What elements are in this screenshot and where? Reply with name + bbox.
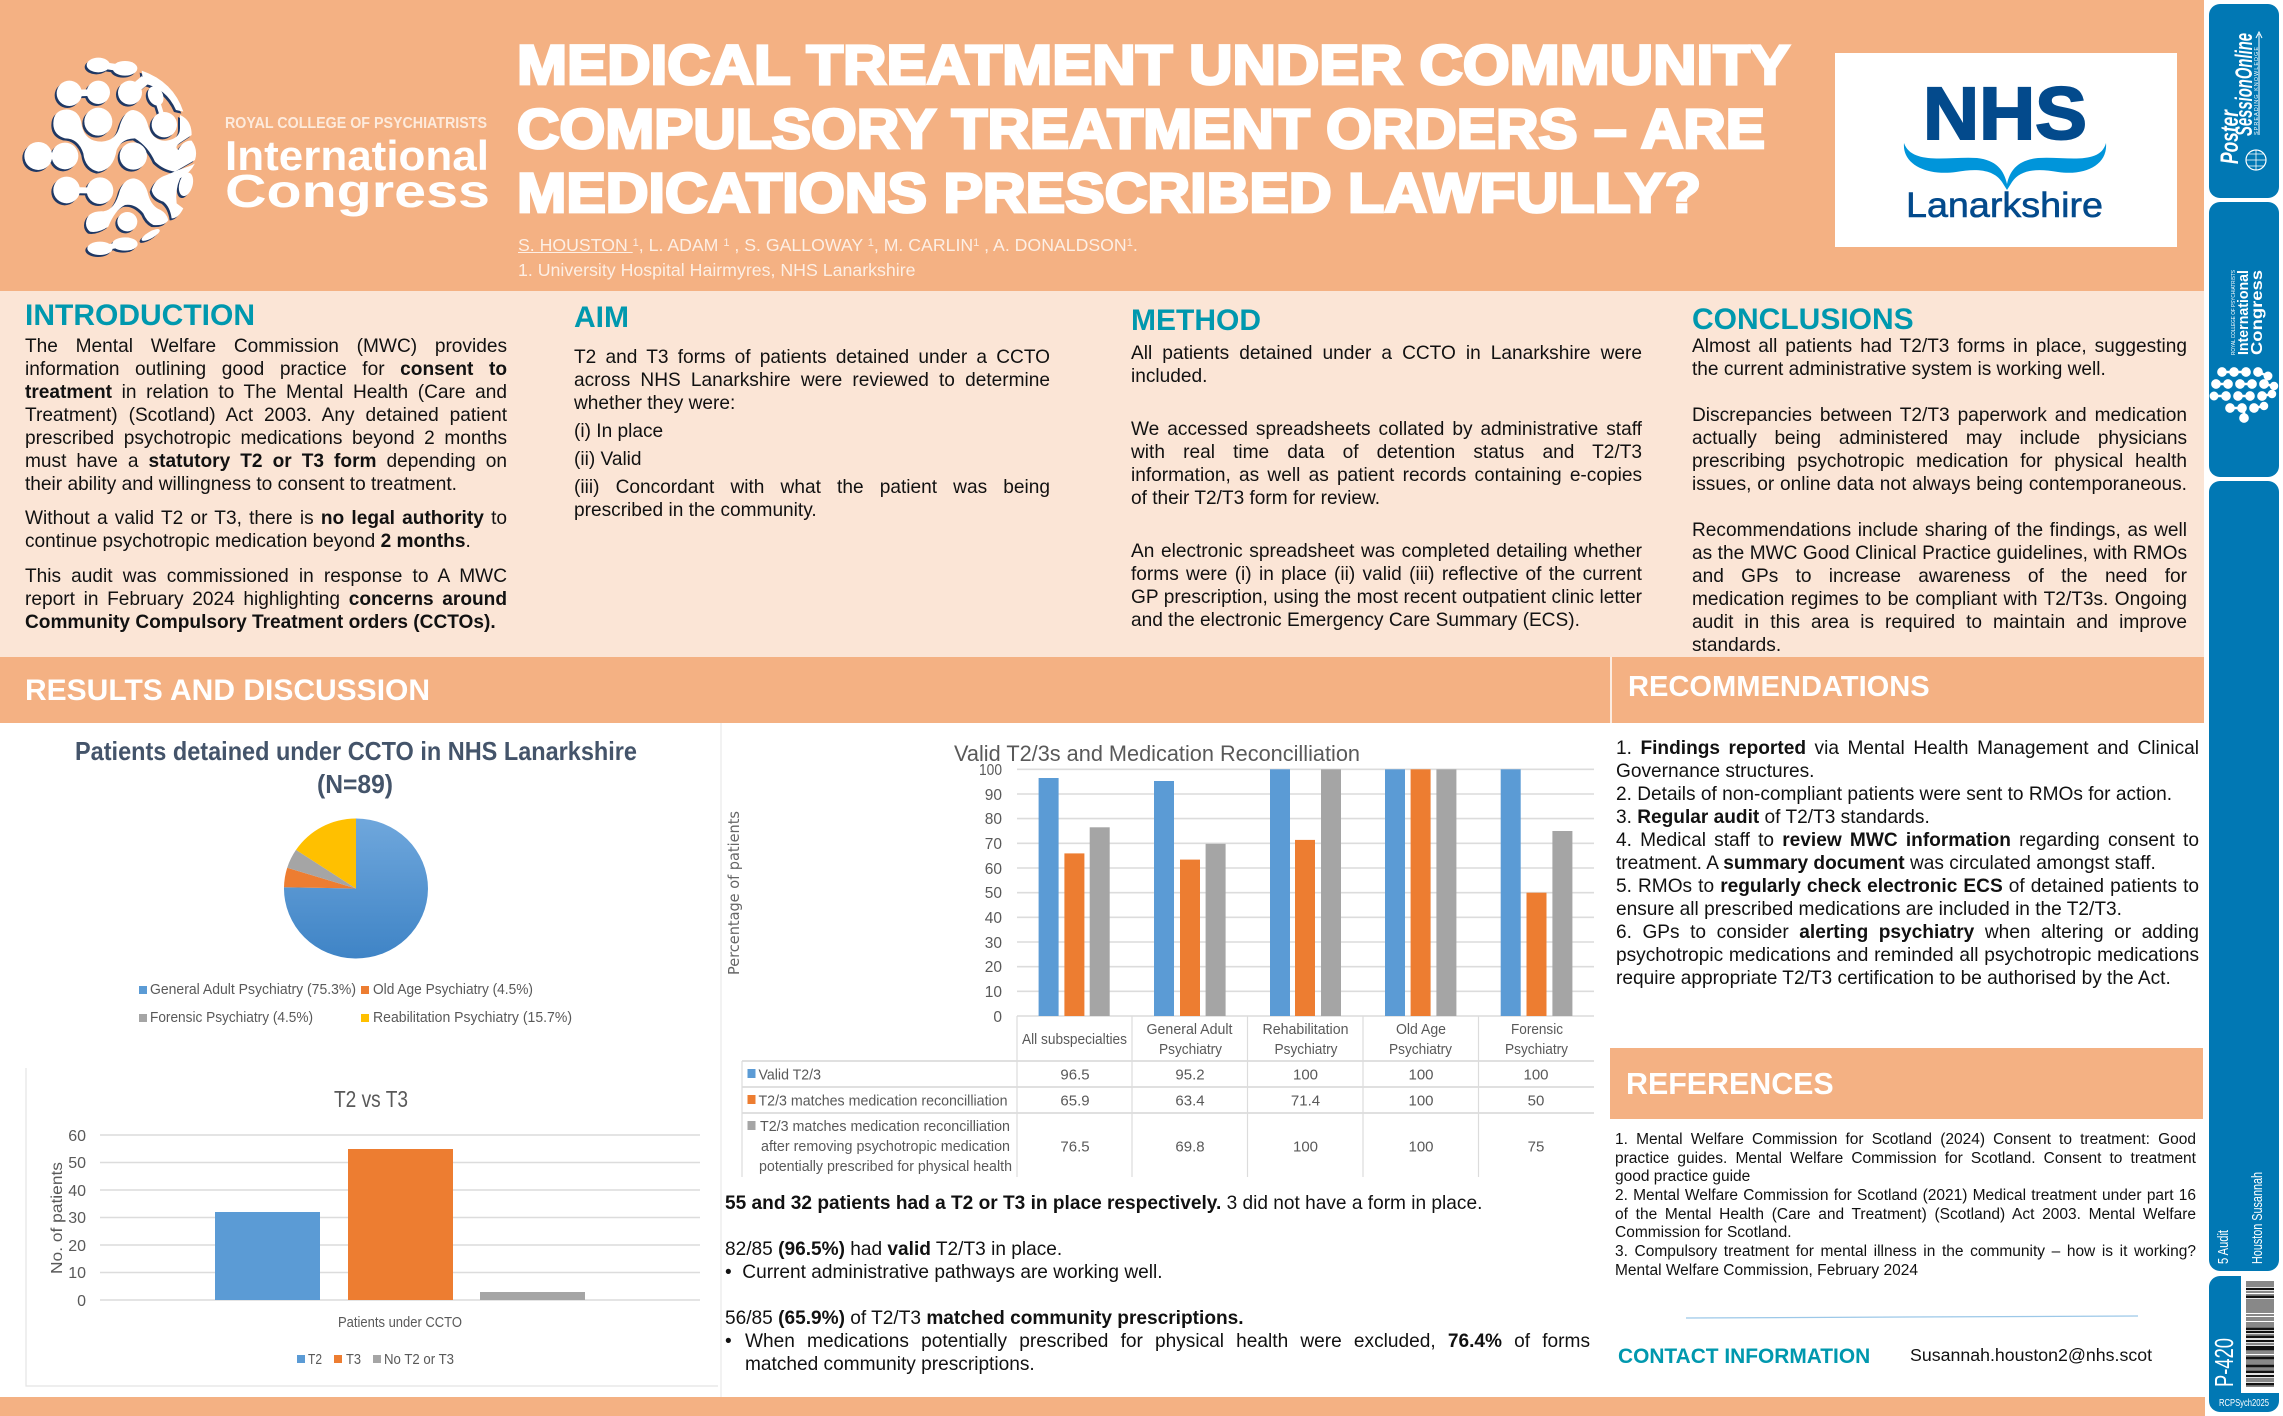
text: method: GP prescription, using the most recent outpatient clinic letter [1131, 587, 1642, 608]
data table: 100 [1293, 1138, 1318, 1156]
pie legend [139, 982, 572, 1026]
data table: 100 [1408, 1092, 1434, 1110]
text: conclusions: and GPs to increase awareness of the need for [1692, 566, 2187, 587]
bar legend [297, 1352, 454, 1368]
data table: Psychiatry [1274, 1041, 1338, 1058]
data table: 76.5 [1060, 1138, 1090, 1156]
data table: Old Age [1396, 1021, 1446, 1038]
heading: conclusions: CONCLUSIONS [1692, 303, 1914, 336]
panel divider [720, 723, 722, 1397]
bar chart with data table: valid T2/3s and medication reconciliation: 70 [985, 836, 1002, 853]
data table: 75 [1528, 1138, 1544, 1156]
logo: NHS Lanarkshire: NHS [1923, 72, 2087, 155]
text: method: with real time data of detention status and T2/T3 [1131, 442, 1642, 463]
text: introduction: must have a statutory T2 or T3 form depending on [25, 451, 507, 472]
text: conclusions: standards. [1692, 635, 1781, 656]
data table: 100 [1408, 1066, 1434, 1084]
bar chart with data table: valid T2/3s and medication reconciliation: 10 [985, 984, 1002, 1001]
bar chart with data table: valid T2/3s and medication reconciliation: 40 [985, 910, 1002, 927]
logo: NHS Lanarkshire: Lanarkshire [1906, 186, 2103, 225]
bar legend: No T2 or T3 [384, 1352, 454, 1368]
text: method: included. [1131, 366, 1207, 387]
text: introduction: prescribed psychotropic medications beyond 2 months [25, 428, 507, 449]
heading: aim: AIM [574, 301, 629, 334]
text: results findings: When medications potentially prescribed for physical health were excluded, 76.4% of forms [745, 1331, 1590, 1352]
text: recommendations list: require appropriate T2/T3 certification to be authorised by the Act. [1616, 968, 2171, 989]
bar chart with data table: valid T2/3s and medication reconciliation: 80 [985, 811, 1002, 828]
text: references: good practice guide [1615, 1168, 1750, 1185]
text: aim: T2 and T3 forms of patients detained under a CCTO [574, 347, 1050, 368]
text: conclusions: audit in this area is required to maintain and improve [1692, 612, 2187, 633]
text: conclusions: Almost all patients had T2/T3 forms in place, suggesting [1692, 336, 2187, 357]
text: results findings: matched community prescriptions. [745, 1354, 1035, 1375]
text: recommendations list: Governance structures. [1616, 761, 1814, 782]
bar chart: T2 vs T3: T2 vs T3 [334, 1086, 408, 1112]
text: conclusions: Discrepancies between T2/T3 paperwork and medication [1692, 405, 2187, 426]
text: references: 2. Mental Welfare Commission for Scotland (2021) Medical treatment under part 16 [1615, 1187, 2196, 1204]
text: conclusions: issues, or online data not always being contemporaneous. [1692, 474, 2187, 495]
data table: Rehabilitation [1262, 1021, 1348, 1038]
text: recommendations list: treatment. A summary document was circulated amongst staff. [1616, 853, 2156, 874]
logo text: Royal College of Psychiatrists International Congress: ROYAL COLLEGE OF PSYCHIATRISTS [225, 115, 487, 132]
text: conclusions: Recommendations include sharing of the findings, as well [1692, 520, 2187, 541]
pie legend: Reabilitation Psychiatry (15.7%) [373, 1010, 572, 1026]
bars: T2/3 matches medication reconciliation [1064, 769, 1546, 1016]
sidebar tab: Poster Session Online: SPREADING KNOWLEDGE [2254, 47, 2260, 135]
text: references: of the Mental Health (Care and Treatment) (Scotland) Act 2003. Mental Welfare [1615, 1206, 2196, 1223]
bars: matches after removing physical health medication [1090, 769, 1572, 1016]
sidebar tab: author and category: 5 Audit [2216, 1230, 2232, 1264]
text: aim: prescribed in the community. [574, 500, 817, 521]
text: introduction: treatment in relation to The Mental Health (Care and [25, 382, 507, 403]
text: conclusions: actually being administered may include physicians [1692, 428, 2187, 449]
bar chart: T2 vs T3: 10 [68, 1265, 86, 1282]
affiliation: 1. University Hospital Hairmyres, NHS Lanarkshire [518, 260, 916, 280]
text: conclusions: prescribing psychotropic medication for physical health [1692, 451, 2187, 472]
data table: Psychiatry [1389, 1041, 1452, 1058]
data table [742, 1016, 1594, 1177]
heading: results and discussion: RESULTS AND DISCUSSION [25, 674, 430, 707]
text: introduction: their ability and willingness to consent to treatment. [25, 474, 457, 495]
bar chart with data table: valid T2/3s and medication reconciliation: 30 [985, 935, 1002, 952]
bar chart: T2 vs T3: 40 [68, 1183, 86, 1200]
text: results findings [725, 1193, 1590, 1375]
data table: 50 [1528, 1092, 1544, 1110]
text: results findings: 56/85 (65.9%) of T2/T3 matched community prescriptions. [725, 1308, 1244, 1329]
text: references: Commission for Scotland. [1615, 1224, 1792, 1241]
text: method: information, as well as patient records containing e-copies [1131, 465, 1642, 486]
text: introduction: report in February 2024 highlighting concerns around [25, 589, 507, 610]
text: results findings: • [725, 1331, 732, 1352]
white divider between results and recommendations [1610, 657, 1612, 723]
data table: 100 [1523, 1066, 1549, 1084]
data table: 71.4 [1291, 1092, 1320, 1110]
bar chart with data table: valid T2/3s and medication reconciliation: 20 [985, 959, 1002, 976]
pie legend: Old Age Psychiatry (4.5%) [373, 982, 533, 998]
text: recommendations list: 5. RMOs to regularly check electronic ECS of detained patients to [1616, 876, 2199, 897]
title: MEDICAL TREATMENT UNDER COMMUNITY [517, 33, 1790, 96]
sidebar tab: Poster Session Online [2209, 4, 2279, 198]
text: recommendations list: 4. Medical staff to review MWC information regarding consent to [1616, 830, 2199, 851]
text: method: forms were (i) in place (ii) valid (iii) reflective of the current [1131, 564, 1642, 585]
references header bar [1610, 1048, 2203, 1119]
sidebar tab: poster number and barcode: P-420 [2209, 1338, 2239, 1387]
text: method: An electronic spreadsheet was completed detailing whether [1131, 541, 1642, 562]
text: conclusions: medication regimes to be compliant with T2/T3s. Ongoing [1692, 589, 2187, 610]
barcode [2246, 1282, 2274, 1386]
data table: Valid T2/3 [758, 1066, 821, 1084]
text: contact email: Susannah.houston2@nhs.scot [1910, 1345, 2152, 1365]
authors: S. HOUSTON 1, L. ADAM 1 , S. GALLOWAY 1, M. CARLIN1 , A. DONALDSON1. [518, 235, 1138, 255]
text: introduction: The Mental Welfare Commission (MWC) provides [25, 336, 507, 357]
bar chart with data table: valid T2/3s and medication reconciliation [725, 741, 1594, 1177]
text: references: 3. Compulsory treatment for mental illness in the community – how is it working? [1615, 1243, 2196, 1260]
logo: college brain mark [24, 58, 196, 255]
data table: All subspecialties [1022, 1031, 1127, 1048]
data table: 95.2 [1175, 1066, 1205, 1084]
data table: T2/3 matches medication reconcilliation [760, 1118, 1010, 1135]
data table: T2/3 matches medication reconcilliation [758, 1092, 1008, 1110]
pie legend: Forensic Psychiatry (4.5%) [150, 1010, 313, 1026]
bar chart with data table: valid T2/3s and medication reconciliation: Percentage of patients [725, 811, 743, 975]
data table: 63.4 [1175, 1092, 1205, 1110]
data table: Forensic [1511, 1021, 1563, 1038]
sidebar tab: International Congress: ROYAL COLLEGE OF PSYCHIATRISTS [2231, 270, 2237, 355]
text: aim [574, 347, 1050, 521]
data table: 96.5 [1060, 1066, 1090, 1084]
text: results findings: 55 and 32 patients had a T2 or T3 in place respectively. 3 did not have a form in place. [725, 1193, 1482, 1214]
text: aim: (i) In place [574, 421, 663, 442]
text: results findings: • Current administrative pathways are working well. [725, 1262, 1163, 1283]
logo text: Royal College of Psychiatrists International Congress: Congress [225, 165, 490, 217]
bar chart: T2 vs T3: 20 [68, 1238, 86, 1255]
header band [0, 0, 2204, 291]
sidebar tab: author and category: Houston Susannah [2250, 1172, 2266, 1264]
pie chart: patients by subspecialty: Patients detained under CCTO in NHS Lanarkshire [75, 736, 637, 766]
sidebar tab: International Congress: International [2236, 270, 2252, 355]
text: references [1615, 1131, 2196, 1279]
text: recommendations list: 6. GPs to consider alerting psychiatry when altering or adding [1616, 922, 2199, 943]
bar legend: T3 [346, 1352, 361, 1368]
sidebar tab: International Congress [2209, 202, 2279, 477]
title: MEDICATIONS PRESCRIBED LAWFULLY? [517, 161, 1701, 224]
text: introduction: information outlining good practice for consent to [25, 359, 507, 380]
text: method: We accessed spreadsheets collated by administrative staff [1131, 419, 1642, 440]
data table: 100 [1408, 1138, 1434, 1156]
data table: General Adult [1146, 1021, 1233, 1038]
heading: method: METHOD [1131, 304, 1261, 337]
heading: contact information: CONTACT INFORMATION [1618, 1345, 1870, 1368]
text: recommendations list: 2. Details of non-compliant patients were sent to RMOs for action. [1616, 784, 2172, 805]
bar chart with data table: valid T2/3s and medication reconciliation: 60 [985, 861, 1002, 878]
text: introduction: Community Compulsory Treatment orders (CCTOs). [25, 612, 496, 633]
bar chart with data table: valid T2/3s and medication reconciliation: Valid T2/3s and Medication Reconcilliation [954, 741, 1360, 766]
text: introduction: This audit was commissioned in response to A MWC [25, 566, 507, 587]
text: conclusions: as the MWC Good Clinical Practice guidelines, with RMOs [1692, 543, 2187, 564]
bar chart: T2 vs T3: No. of patients [49, 1162, 66, 1274]
text: results findings: 82/85 (96.5%) had valid T2/T3 in place. [725, 1239, 1062, 1260]
contact divider [1686, 1316, 2138, 1318]
sidebar tab: International Congress: Congress [2249, 270, 2266, 355]
heading: recommendations: RECOMMENDATIONS [1628, 671, 1930, 703]
pie chart: patients by subspecialty: (N=89) [317, 769, 393, 799]
data table: after removing psychotropic medication [761, 1138, 1010, 1155]
bar chart: T2 vs T3: 60 [68, 1128, 86, 1145]
text: method: of their T2/T3 form for review. [1131, 488, 1380, 509]
intro section background [0, 291, 2204, 657]
text: references: Mental Welfare Commission, February 2024 [1615, 1262, 1918, 1279]
results section bar [0, 657, 2204, 723]
bar chart with data table: valid T2/3s and medication reconciliation: 100 [979, 762, 1002, 779]
data table: Psychiatry [1505, 1041, 1568, 1058]
text: references: 1. Mental Welfare Commission for Scotland (2024) Consent to treatment: Good [1615, 1131, 2196, 1148]
bar chart: T2 vs T3 [26, 1068, 718, 1386]
text: introduction: Treatment) (Scotland) Act 2003. Any detained patient [25, 405, 507, 426]
bars: valid T2/3 [1039, 769, 1521, 1016]
text: aim: whether they were: [574, 393, 735, 414]
title: COMPULSORY TREATMENT ORDERS – ARE [517, 97, 1765, 160]
pie chart: patients by subspecialty [75, 736, 637, 1026]
text: introduction: Without a valid T2 or T3, there is no legal authority to [25, 508, 507, 529]
text: method [1131, 343, 1642, 631]
text: introduction [25, 336, 507, 633]
text: introduction: continue psychotropic medication beyond 2 months. [25, 531, 471, 552]
text: recommendations list [1616, 738, 2199, 989]
logo text: Royal College of Psychiatrists International Congress: International [225, 132, 489, 179]
data table: potentially prescribed for physical health [759, 1158, 1012, 1175]
text: method: All patients detained under a CCTO in Lanarkshire were [1131, 343, 1642, 364]
text: recommendations list: psychotropic medications and reminded all psychotropic medications [1616, 945, 2199, 966]
pie legend: General Adult Psychiatry (75.3%) [150, 982, 356, 998]
heading: references: REFERENCES [1626, 1067, 1834, 1101]
title [517, 33, 1790, 224]
bar chart: T2 vs T3: 0 [77, 1293, 86, 1310]
bar chart: T2 vs T3: 50 [68, 1155, 86, 1172]
bar chart with data table: valid T2/3s and medication reconciliation: 90 [985, 787, 1002, 804]
bar chart with data table: valid T2/3s and medication reconciliation: 0 [993, 1009, 1002, 1026]
text: conclusions [1692, 336, 2187, 656]
bar chart with data table: valid T2/3s and medication reconciliation: 50 [985, 885, 1002, 902]
text: conclusions: the current administrative system is working well. [1692, 359, 2106, 380]
text: recommendations list: 1. Findings reported via Mental Health Management and Clinical [1616, 738, 2199, 759]
text: aim: across NHS Lanarkshire were reviewed to determine [574, 370, 1050, 391]
icon: brain dots [2211, 368, 2277, 422]
text: recommendations list: 3. Regular audit of T2/T3 standards. [1616, 807, 1930, 828]
bar chart: T2 vs T3: Patients under CCTO [338, 1315, 462, 1331]
text: references: practice guides. Mental Welfare Commission for Scotland. Consent to treatment [1615, 1150, 2196, 1167]
text: recommendations list: ensure all prescribed medications are included in the T2/T3. [1616, 899, 2122, 920]
logo text: Royal College of Psychiatrists International Congress [225, 115, 490, 217]
sidebar tab: author and category [2209, 481, 2279, 1271]
bar chart: T2 vs T3: 30 [68, 1210, 86, 1227]
sidebar tab: Poster Session Online: Poster [2216, 109, 2244, 164]
bar legend: T2 [308, 1352, 322, 1368]
text: aim: (iii) Concordant with what the patient was being [574, 477, 1050, 498]
data table: 100 [1293, 1066, 1318, 1084]
heading: introduction: INTRODUCTION [25, 299, 255, 332]
text: method: and the electronic Emergency Care Summary (ECS). [1131, 610, 1580, 631]
data table: Psychiatry [1159, 1041, 1222, 1058]
text: aim: (ii) Valid [574, 449, 642, 470]
bottom band [0, 1397, 2205, 1416]
sidebar tab: poster number and barcode [2209, 1276, 2283, 1416]
data table: 65.9 [1060, 1092, 1090, 1110]
logo: NHS Lanarkshire [1835, 53, 2177, 247]
data table: 69.8 [1175, 1138, 1205, 1156]
